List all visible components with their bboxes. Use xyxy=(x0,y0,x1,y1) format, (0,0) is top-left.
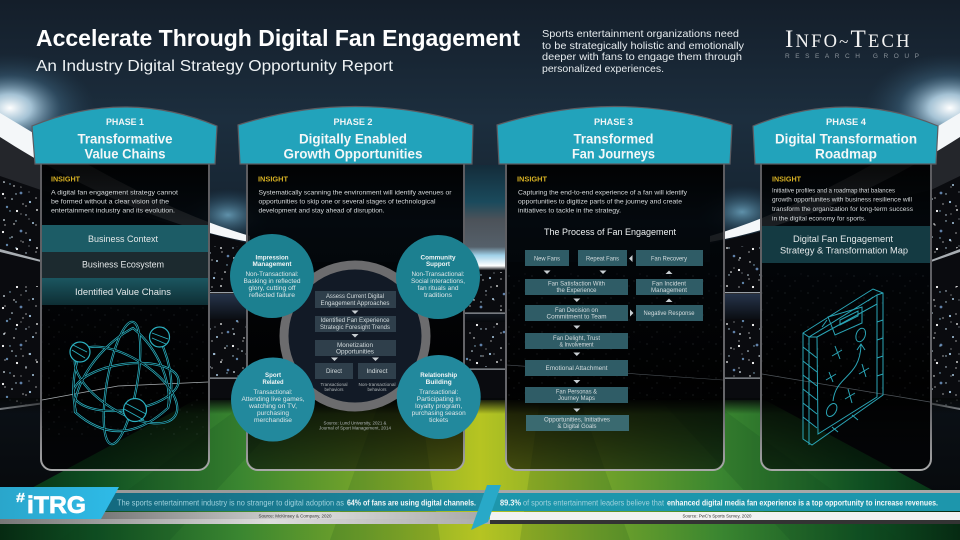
crowd dots centre gap xyxy=(465,272,506,367)
floodlight glow left xyxy=(0,53,95,163)
panel: phase 3 xyxy=(497,106,732,470)
circle: relationship building: Building xyxy=(426,379,452,386)
box: fan satisfaction: the Experience xyxy=(556,288,597,294)
box: negative response xyxy=(636,305,703,321)
circle: relationship building xyxy=(397,355,481,439)
circle: sport related: Related xyxy=(262,379,284,386)
right stand xyxy=(710,176,960,400)
panel 1 insight: A digital fan engagement strategy cannot xyxy=(51,190,178,196)
panel 4 faint dots xyxy=(762,270,930,400)
panel 2 body xyxy=(247,160,464,470)
panel 2 insight: INSIGHT xyxy=(258,176,289,184)
crowd dots left edge xyxy=(0,180,41,408)
intro text block: deeper with fans to engage them through xyxy=(542,51,742,63)
navy tier bands xyxy=(209,294,762,322)
crowd dots left edge fine xyxy=(0,180,41,408)
panel 3 faint dots xyxy=(507,270,723,400)
panel 3 body xyxy=(506,160,724,470)
crowd dots right gap xyxy=(724,246,762,377)
behaviour labels: Transactional xyxy=(320,382,348,387)
panel 2 insight: Systematically scanning the environment will identify avenues or xyxy=(258,190,452,196)
box: direct: Direct xyxy=(326,369,342,375)
panel 1 header xyxy=(32,107,217,164)
panel 4 header: PHASE 4 xyxy=(826,117,866,127)
source note xyxy=(319,420,392,431)
panel 1 insight: INSIGHT xyxy=(51,176,81,184)
gap lines xyxy=(209,292,762,379)
panel: phase 4 xyxy=(753,107,938,470)
panel 4 insight: Initiative profiles and a roadmap that balances xyxy=(772,188,896,195)
circle: relationship building: loyalty program, xyxy=(415,403,462,410)
circle: sport related: watching on TV, xyxy=(248,403,297,410)
panel 1 list bands xyxy=(42,225,208,305)
box: identified xyxy=(315,316,396,332)
box: new fans xyxy=(525,250,569,266)
circle: community support: traditions xyxy=(424,292,452,299)
right haze xyxy=(697,186,787,238)
centre gap haze column xyxy=(465,165,506,270)
box: monetization xyxy=(315,340,396,356)
circle: relationship building: tickets xyxy=(429,417,448,424)
circle: community support: Non-Transactional: xyxy=(412,271,465,278)
panel 4 header: Roadmap xyxy=(815,146,877,162)
pitch xyxy=(0,400,960,540)
box: new fans: New Fans xyxy=(534,256,560,262)
floodlight glow right xyxy=(865,53,960,163)
flow title: The Process of Fan Engagement xyxy=(544,227,676,237)
circle: relationship building: Relationship xyxy=(420,372,457,379)
circle: sport related: merchandise xyxy=(254,417,293,424)
hashtag badge: # xyxy=(16,490,26,505)
circle: community support: fan rituals and xyxy=(418,285,459,292)
panel 4 band: Strategy & Transformation Map xyxy=(780,246,908,256)
stat left: 64% of fans are using digital channels. xyxy=(347,498,476,508)
panel 3 header: PHASE 3 xyxy=(594,117,633,127)
circle: impression management: glory, cutting off xyxy=(248,285,296,292)
circle: relationship building: Participating in xyxy=(417,396,461,403)
panel 3 header: Transformed xyxy=(574,130,654,146)
logo: Info-Tech Research Group: RESEARCH GROUP xyxy=(785,53,924,60)
circle: sport related: Transactional: xyxy=(254,389,293,396)
process flow chart xyxy=(525,227,703,431)
left haze xyxy=(183,189,273,241)
intro text block: to be strategically holistic and emotionally xyxy=(542,40,745,52)
box: assess: Engagement Approaches xyxy=(320,301,390,307)
icon: atom sphere xyxy=(63,319,189,447)
box: repeat fans: Repeat Fans xyxy=(586,256,619,262)
bottom banner left xyxy=(0,490,490,524)
intro text block: Sports entertainment organizations need xyxy=(542,28,739,40)
panel 2 insight xyxy=(258,176,452,214)
panel 2 header: Digitally Enabled xyxy=(299,130,407,146)
box: fan incident xyxy=(636,279,703,295)
panel 3 horizon line xyxy=(507,365,723,380)
panel 1 faint dots xyxy=(42,305,208,435)
panel 2 header: Growth Opportunities xyxy=(284,146,423,162)
panel 4 insight: transform the organization for long-term success xyxy=(772,206,914,213)
panel 1 horizon line xyxy=(42,382,208,400)
panel 2 header: PHASE 2 xyxy=(334,117,372,127)
source left: Source: McKinsey & Company, 2020 xyxy=(258,514,332,519)
panel 1 header: PHASE 1 xyxy=(106,117,144,127)
panel: phase 1 xyxy=(32,107,217,470)
box: fan recovery xyxy=(636,250,703,266)
panel 4 header xyxy=(753,107,938,164)
circle: impression management: Management xyxy=(252,261,292,268)
box: emotional attachment xyxy=(525,360,628,376)
box: opportunities: Opportunities, Initiatives xyxy=(544,418,610,424)
behaviour labels: behaviors xyxy=(324,387,344,392)
hashtag badge xyxy=(0,487,119,519)
box: fan decision xyxy=(525,305,628,321)
pitch top fade xyxy=(0,398,960,414)
behaviour labels: Non-transactional xyxy=(358,382,396,387)
panel 2 insight: opportunities to skip one or several stages of technological xyxy=(258,198,436,206)
logo: Info-Tech Research Group: INFO~TECH xyxy=(785,26,912,53)
box: fan personas: Journey Maps xyxy=(558,396,595,402)
box: emotional attachment: Emotional Attachment xyxy=(546,366,608,372)
box: monetization: Opportunities xyxy=(336,350,374,356)
panel 3 insight xyxy=(517,176,688,214)
box: opportunities xyxy=(526,415,629,431)
circle: impression management: Basking in reflected xyxy=(244,278,301,285)
box: identified: Identified Fan Experience xyxy=(320,318,390,324)
left stand xyxy=(0,176,250,400)
panel 4 insight: in the digital economy for sports. xyxy=(772,215,866,222)
icon: clipboard play xyxy=(803,289,883,445)
bottom banner right xyxy=(490,490,960,524)
left bright roof band xyxy=(0,113,250,242)
panel 3 insight: opportunities to digitize parts of the journey and create xyxy=(518,198,682,206)
concourse lines xyxy=(0,249,960,410)
box: assess: Assess Current Digital xyxy=(326,294,384,300)
left stand roof xyxy=(0,132,250,262)
circle: sport related: Attending live games, xyxy=(242,396,305,403)
panel 1 insight: be formed without a clear vision of the xyxy=(51,198,169,206)
right bright roof band xyxy=(710,113,960,242)
box: indirect: Indirect xyxy=(366,369,388,375)
ribbon fold xyxy=(471,485,501,530)
panel 4 header: Digital Transformation xyxy=(775,130,917,146)
box: fan delight xyxy=(525,333,628,349)
circle: community support: Support xyxy=(426,261,450,268)
centre stand xyxy=(250,262,710,402)
crowd dots right edge fine xyxy=(931,180,960,408)
box: fan satisfaction xyxy=(525,279,628,295)
circle: impression management xyxy=(230,234,314,318)
stat right xyxy=(500,498,938,508)
panel 1 header: Transformative xyxy=(78,130,173,146)
circle: impression management: reflected failure xyxy=(249,292,296,299)
panel 3 insight: INSIGHT xyxy=(517,176,548,184)
panel 3 header xyxy=(497,106,732,164)
box: fan incident: Fan Incident xyxy=(652,282,686,288)
panel 1 list bands: Identified Value Chains xyxy=(75,287,172,297)
circle: sport related: purchasing xyxy=(257,410,290,417)
panel 4 body xyxy=(761,160,931,470)
source right: Source: PwC's Sports Survey, 2020 xyxy=(682,514,752,519)
stat right: of sports entertainment leaders believe that xyxy=(523,498,665,508)
intro text block xyxy=(542,28,745,75)
circle: community support xyxy=(396,235,480,319)
box: fan personas: Fan Personas & xyxy=(556,390,597,396)
box: fan personas xyxy=(525,387,628,403)
box: fan satisfaction: Fan Satisfaction With xyxy=(548,282,605,288)
crowd dots left gap xyxy=(209,246,248,377)
panel 1 list bands: Business Context xyxy=(88,234,158,244)
box: repeat fans xyxy=(578,250,627,266)
box: monetization: Monetization xyxy=(337,343,373,349)
hashtag badge: iTRG xyxy=(27,492,86,519)
circle: sport related: Sport xyxy=(265,372,281,379)
panel 3 header: Fan Journeys xyxy=(572,146,655,162)
source note: Journal of Sport Management, 2014 xyxy=(319,426,392,431)
panel 1 list bands: Business Ecosystem xyxy=(82,260,164,270)
box: fan decision: Commitment to Team xyxy=(546,314,607,320)
title: Accelerate Through Digital Fan Engagement xyxy=(36,25,520,51)
box: assess xyxy=(315,291,396,308)
circle: impression management: Impression xyxy=(256,254,289,262)
pitch stripes xyxy=(60,400,900,540)
arrows xyxy=(331,310,379,361)
behaviour labels: behaviors xyxy=(368,387,387,392)
crowd dots right edge xyxy=(931,180,960,408)
panel 4 insight xyxy=(772,176,914,222)
flow arrows xyxy=(544,255,672,412)
box: opportunities: & Digital Goals xyxy=(558,424,596,430)
circle: community support: Social interactions, xyxy=(411,278,465,285)
intro text block: personalized experiences. xyxy=(542,63,664,75)
box: fan incident: Management xyxy=(651,288,687,294)
panel 4 insight: INSIGHT xyxy=(772,176,802,184)
box: fan recovery: Fan Recovery xyxy=(651,256,687,262)
panel 1 body xyxy=(41,160,209,470)
panel 1 insight xyxy=(51,176,178,214)
panel 4 insight: growth opportunites with business resilience will xyxy=(772,197,912,204)
crowd dots gaps fine xyxy=(209,246,762,377)
circle: community support: Community xyxy=(420,254,456,262)
panel 4 band xyxy=(762,226,930,263)
stat left: The sports entertainment industry is no stranger to digital adoption as xyxy=(117,498,344,508)
circle: sport related xyxy=(231,358,315,442)
panel 2 insight: development and stay ahead of disruption. xyxy=(258,208,385,214)
subtitle: An Industry Digital Strategy Opportunity Report xyxy=(36,58,394,75)
panel 4 horizon line xyxy=(762,374,930,402)
panel: phase 2 xyxy=(230,106,481,470)
panel 1 insight: entertainment industry and its evolution. xyxy=(51,208,175,214)
stat left xyxy=(117,498,476,508)
box: fan delight: Fan Delight, Trust xyxy=(553,336,600,342)
box: fan delight: & Involvement xyxy=(560,342,594,348)
right stand roof xyxy=(710,132,960,262)
box: indirect xyxy=(358,363,396,379)
panel 2 header xyxy=(238,106,473,164)
central ring diagram xyxy=(284,265,426,407)
circle: relationship building: Transactional: xyxy=(419,389,458,396)
panel 3 insight: initiatives to tackle in the strategy. xyxy=(518,208,621,214)
behaviour labels xyxy=(320,382,396,392)
box: identified: Strategic Foresight Trends xyxy=(320,325,390,331)
panel 4 band: Digital Fan Engagement xyxy=(793,234,894,244)
circle: relationship building: purchasing season xyxy=(412,410,466,417)
circle: impression management: Non-Transactional: xyxy=(246,271,299,278)
stat right: 89.3% xyxy=(500,498,521,508)
panel 3 insight: Capturing the end-to-end experience of a fan will identify xyxy=(518,190,688,196)
box: direct xyxy=(315,363,353,379)
box: fan decision: Fan Decision on xyxy=(555,308,598,314)
source note: Source: Lund University, 2021 & xyxy=(324,420,387,426)
panel 1 header: Value Chains xyxy=(84,146,166,162)
box: negative response: Negative Response xyxy=(644,311,695,317)
